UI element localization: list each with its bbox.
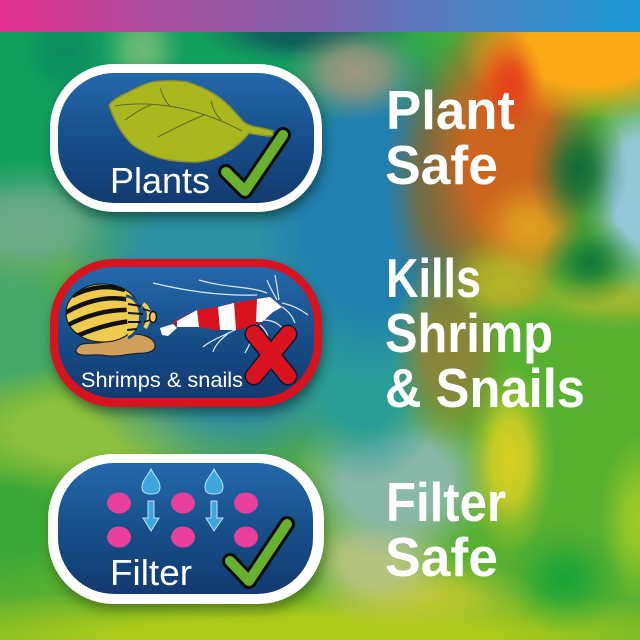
badge: shrimps and snails bbox=[50, 259, 323, 413]
heading: Kills Shrimp & Snails: Shrimp bbox=[385, 302, 553, 364]
label: Shrimps & snails: Shrimps & snails bbox=[81, 368, 243, 392]
badge: filter bbox=[48, 454, 325, 610]
heading: Filter Safe bbox=[385, 471, 506, 588]
heading: Kills Shrimp & Snails: & Snails bbox=[385, 357, 585, 419]
icon: shrimp bbox=[153, 275, 308, 353]
heading: Kills Shrimp & Snails bbox=[385, 247, 585, 419]
badge: plants bbox=[50, 64, 323, 218]
icon: water drops and arrows bbox=[142, 469, 223, 531]
icon: red cross bbox=[254, 334, 288, 376]
icon: leaf bbox=[109, 81, 273, 162]
heading: Filter Safe: Safe bbox=[385, 526, 498, 588]
heading: Plant Safe bbox=[385, 79, 515, 196]
label: Filter: Filter bbox=[110, 552, 192, 593]
icon: filter media dots bbox=[107, 492, 258, 548]
heading: Plant Safe: Safe bbox=[385, 134, 498, 196]
icon: green check bbox=[226, 135, 283, 191]
top gradient bar bbox=[0, 0, 640, 32]
heading: Kills Shrimp & Snails: Kills bbox=[386, 247, 481, 309]
label: Plants: Plants bbox=[110, 160, 210, 201]
icon: green check bbox=[230, 524, 287, 581]
heading: Plant Safe: Plant bbox=[386, 79, 515, 141]
heading: Filter Safe: Filter bbox=[386, 471, 506, 533]
icon: snail bbox=[65, 284, 156, 356]
